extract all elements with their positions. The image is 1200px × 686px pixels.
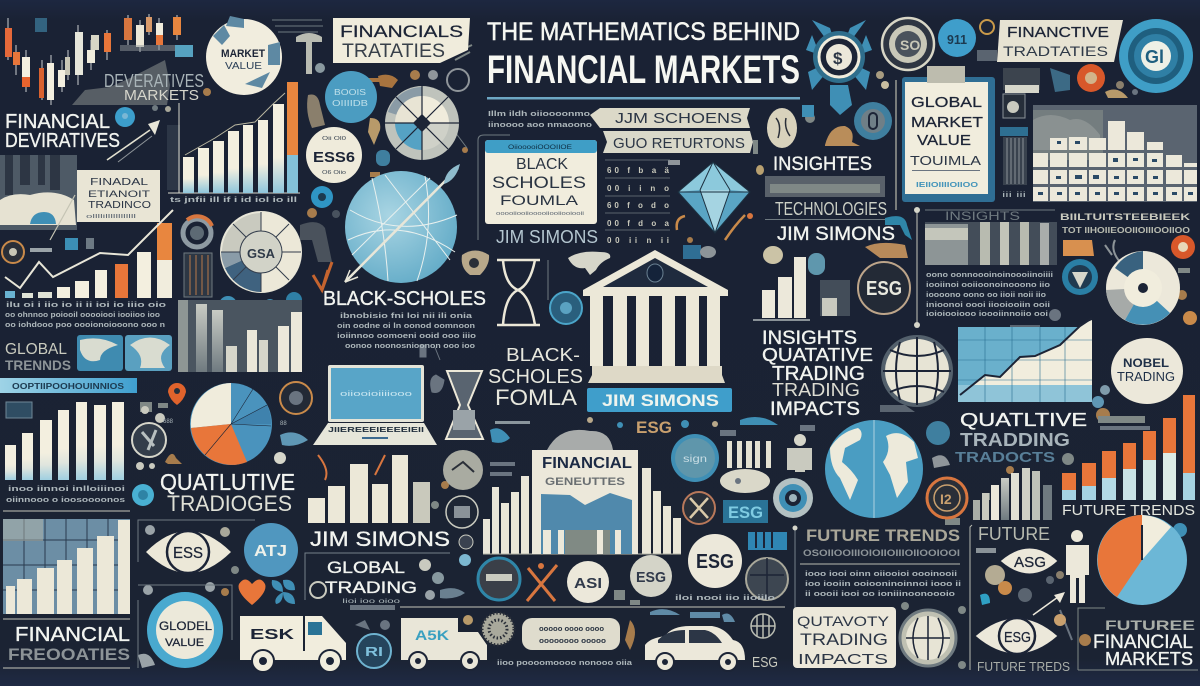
icon: truck ESK: ESK — [250, 626, 294, 643]
icon: small orange ring — [980, 20, 994, 34]
heading: black scholes fomla: FOMLA — [495, 385, 577, 410]
panel: future financial markets: MARKETS — [1105, 649, 1193, 669]
truck: A5K: A5K — [415, 627, 449, 643]
heading: insights quatative impacts: TRADING — [772, 363, 865, 385]
text block: intro: iinoooo aoo nmaoono — [488, 122, 592, 129]
ribbon: jim schoens — [590, 108, 750, 128]
heading: future treds: FUTURE TREDS — [977, 659, 1070, 674]
chart: pie future — [1097, 515, 1187, 605]
blue strip heading: OOPTIIPOOHOUINNIOS — [12, 382, 125, 391]
heading: quatative trading: TRADDING — [960, 430, 1070, 450]
badge: ATJ: ATJ — [254, 543, 287, 560]
clipboard: global market value: GLOBAL — [911, 94, 982, 111]
heading: qualitative tradioges: TRADIOGES — [167, 491, 292, 516]
bar chart: orange future trends — [1062, 395, 1195, 500]
text: esg small: ESG — [752, 654, 778, 671]
text block: insights body — [926, 272, 1053, 318]
laptop: oiiooioiiiiooo — [340, 391, 412, 398]
chart: pie dial GSA: GSA — [247, 246, 276, 261]
badge: blue sign: sign — [683, 454, 707, 465]
table of symbols: 00 ii n ii — [607, 236, 669, 245]
icon: donut — [183, 216, 212, 247]
heading: global trends: GLOBAL — [5, 341, 67, 358]
badge: gray moon — [443, 450, 483, 490]
gear icon: $ — [833, 49, 843, 68]
heading: financial deveratives — [5, 111, 120, 152]
panel: future financial markets: FINANCIAL — [1093, 632, 1193, 653]
badge: blue circle: BOOIS — [334, 88, 366, 97]
candlestick chart — [5, 14, 193, 105]
panel: quantity trading impacts: TRADING — [800, 630, 888, 649]
badge: nobel trading: NOBEL — [1123, 356, 1169, 370]
panel: global trading: TRADING — [325, 578, 417, 597]
heading: future trends left: OSOIIOOIIIOIOIIOIIIOIIOOIOOI — [803, 548, 960, 558]
text block: insights body: ioooono oono oo iioii noii iio — [926, 292, 1046, 299]
icon: eye ESS — [146, 531, 231, 573]
cluster: misc blobs near global — [419, 554, 471, 600]
bars: center right — [753, 253, 850, 320]
icon: blue badge: RI — [365, 644, 383, 659]
icon: globe bottom — [900, 610, 956, 666]
icon: heart — [239, 580, 265, 605]
heading: qualitative tradioges: QUATLUTIVE — [160, 469, 295, 495]
icon: dotted ball — [482, 613, 514, 645]
text block: scholes body — [337, 313, 476, 350]
icon: blue coin right — [854, 102, 892, 140]
ribbon: financtive — [977, 20, 1123, 62]
badge: market value: VALUE — [225, 61, 262, 72]
icon: blue dark circle — [478, 558, 520, 600]
heading: black-scholes: BLACK-SCHOLES — [323, 288, 486, 310]
badge: ESS6: Oii Ol0 — [322, 136, 346, 142]
badge: glodel value — [147, 592, 223, 668]
badge: blue circle: OIIIIDB — [332, 99, 368, 108]
panel: black scholes formula: FOUMLA — [500, 192, 579, 208]
heading: financial bottom left — [8, 624, 130, 664]
heading: insights quatative impacts: QUATATIVE — [762, 345, 873, 365]
text block: future trends body: ioo iooiin ooiooninoinnoi iooo ii — [805, 581, 961, 588]
ribbon: returtons — [603, 131, 753, 153]
chart: pie — [190, 383, 272, 465]
clipboard: global market value — [896, 66, 995, 210]
badge: ESG gray — [630, 555, 672, 597]
banner: jim simons: JIM SIMONS — [602, 391, 719, 410]
icons: orange tag and badge — [1063, 235, 1195, 259]
heading: quatative trading: QUATLTIVE — [960, 410, 1087, 430]
panel: black scholes formula — [478, 135, 597, 240]
icon: animal — [568, 252, 610, 275]
text block: insights body: oono oonnoooinoinoooiinoiiii — [926, 272, 1053, 279]
panel: black scholes formula: OiiooooiOOOIIOE — [508, 145, 572, 151]
badge: market value: MARKET — [221, 48, 265, 60]
icon: ring badge — [132, 423, 166, 457]
panel: black scholes formula: BLACK — [516, 156, 568, 173]
heading: jim simons center: JIM SIMONS — [496, 227, 598, 247]
banner: jim simons — [587, 388, 732, 412]
text block: chart caption: inoo iinnoi inlloiiinoi — [8, 486, 125, 493]
icon: blue shield — [1062, 259, 1098, 295]
panel: financials tratatties: TRATATIES — [342, 41, 445, 62]
panel: financial trading note: ollllillllllllllll — [86, 214, 136, 220]
laptop: JIIEREEEIEEEEIEII — [328, 427, 424, 434]
heading: insights quatative impacts: INSIGHTS — [762, 328, 857, 349]
heading: black scholes fomla: SCHOLES — [488, 366, 583, 388]
heading: global trends: TRENNDS — [5, 357, 71, 373]
heading: insightes and technologies: TECHNOLOGIES — [775, 199, 887, 219]
text block: under chart: oo iohdooo poo oooionoiooono ooo n — [5, 322, 165, 329]
text block: scholes body: oin oodne oi ln oonod oomnoon — [337, 323, 475, 330]
decor: orange figures — [677, 213, 753, 240]
heading: quatative trading: TRADOCTS — [955, 449, 1055, 466]
ribbon: returtons: GUO RETURTONS — [613, 135, 745, 152]
icon: ring — [446, 496, 478, 528]
badge: ESS6: ESS6 — [313, 149, 355, 166]
pointer line — [50, 195, 75, 240]
badge: blue circle small — [938, 19, 976, 57]
small panels: right top: iii iii — [1002, 192, 1027, 199]
heading: insights quatative impacts: TRADING — [772, 380, 860, 400]
icon: column building — [184, 253, 212, 297]
icon: orange ring badge — [280, 382, 312, 414]
icon: blue sweep — [865, 216, 912, 258]
panel: quantity trading impacts: QUTAVOTY — [797, 613, 890, 629]
table of symbols — [605, 160, 670, 245]
text strip: small labels: iloi nooi iio iioiilo — [675, 595, 775, 602]
heading: black scholes fomla — [488, 345, 583, 410]
arrow: up right — [107, 120, 160, 162]
cream blob — [720, 469, 770, 493]
chart: line over bars — [5, 210, 173, 298]
heading: insights quatative impacts — [762, 328, 873, 420]
text block: intro — [488, 111, 592, 129]
icon: blue dial — [550, 292, 582, 324]
text strip: small labels: iioo poooomoooo nonooo oiia — [497, 660, 632, 667]
icon: hourglass lower — [446, 371, 483, 439]
badge: ESG — [858, 262, 910, 314]
icon cluster: small screens — [30, 238, 94, 252]
badge: market value — [206, 16, 282, 95]
panel: quantity trading impacts: IMPACTS — [798, 651, 888, 668]
badge: esg blue — [723, 500, 768, 523]
icon: eye ESS: ESS — [173, 545, 203, 562]
text block: future trends body — [805, 571, 961, 598]
badge: blue circle small: 911 — [947, 32, 967, 47]
earth globe — [825, 420, 923, 518]
badge: glodel value: GLODEL — [159, 619, 212, 633]
icon: gray ring — [746, 558, 788, 600]
text block: scholes body: oonoo noonosnioonon ooo ioo — [345, 343, 475, 350]
badge: ESG: ESG — [866, 278, 902, 300]
clipboard: global market value: TOUIMLA — [910, 153, 981, 168]
panel: financial trading note: FINADAL — [90, 177, 149, 188]
badge: ASI: ASI — [574, 575, 602, 592]
panel: global trading: Iioi ioo oioo — [342, 599, 401, 605]
coin icon: SO — [900, 37, 920, 53]
panel: financial trading note: ETIANOIT — [88, 189, 151, 199]
panel: global trading — [305, 553, 450, 605]
text block: insights body: inioonoi oooi iiooiooiin ooii — [926, 302, 1050, 309]
truck: A5K — [401, 618, 487, 670]
ribbon: financtive: FINANCTIVE — [1007, 24, 1109, 41]
text block: intro: Illm ildh oiioooonmo — [488, 111, 590, 118]
icon: person — [1066, 530, 1089, 603]
icon: globe small — [751, 614, 775, 638]
panel: global trading: GLOBAL — [327, 558, 405, 577]
bar chart: grid panel — [3, 519, 130, 668]
stripes — [727, 441, 771, 468]
ribbon: jim schoens: JJM SCHOENS — [615, 110, 742, 127]
panel: financials tratatties: FINANCIALS — [340, 22, 463, 41]
decor strip above financial panel — [490, 417, 778, 443]
icon: snail blob — [802, 71, 889, 146]
panel: black scholes formula: SCHOLES — [492, 173, 586, 192]
icon: blue book — [748, 532, 787, 550]
clipboard: global market value: IEIIOIIIIOIIOO — [916, 182, 979, 189]
icon: blue coin — [132, 484, 154, 506]
radial chart — [385, 86, 459, 160]
clipboard: global market value: MARKET — [911, 114, 983, 131]
heading: onds tail — [459, 535, 473, 549]
icon: truck ESK — [240, 616, 346, 672]
icon: ring orange: I2 — [940, 491, 952, 507]
chart: donut — [1106, 251, 1180, 325]
text block: under chart: oo ohnnoo poiooil ooooiooi iooiioo ioo — [5, 312, 160, 319]
panel: future eye chart: ASG — [1014, 554, 1046, 571]
text block: insights body: ioioiooiooo ioooiinnoiio ooi — [926, 311, 1048, 318]
label: pill — [522, 618, 620, 650]
icon: gavel — [272, 20, 325, 74]
text block: under chart: ilu oi i iio io ii ii ioi io iiio oio — [6, 302, 166, 309]
coin icon — [882, 18, 934, 70]
title: THE MATHEMATICS BEHIND — [487, 18, 800, 46]
label: pill: ooooo oooo oooo — [539, 626, 604, 633]
heading: insightes and technologies: INSIGHTES — [773, 154, 872, 175]
bar chart: under laptop — [308, 455, 430, 523]
table of symbols: 00 i i n o — [607, 184, 669, 193]
panel: financial trading note — [77, 170, 160, 222]
icon: blue badge — [357, 634, 391, 668]
heading: black scholes fomla: BLACK- — [506, 345, 580, 365]
badge: ESS6: O6 Oiio — [322, 170, 346, 176]
icon: orange drop — [168, 383, 186, 405]
chart: gray bars — [178, 300, 302, 372]
badge: glodel value: VALUE — [165, 637, 204, 649]
panel: quantity trading impacts — [793, 607, 896, 668]
icon: orange x tools — [527, 563, 557, 601]
globe with needle — [345, 164, 460, 283]
title: FINANCIAL MARKETS — [487, 48, 800, 92]
panel: future financial markets — [1078, 608, 1198, 670]
text block: under chart — [5, 302, 166, 329]
panel: financials tratatties — [333, 18, 470, 63]
badge: ASI — [567, 561, 609, 603]
text block: scholes body: ibnobisio fni loi nii ili onia — [340, 313, 472, 320]
ribbon: financtive: TRADTATIES — [1003, 43, 1108, 59]
heading: future trends right: FUTURE TRENDS — [1062, 502, 1195, 519]
icon: blue flower — [272, 580, 295, 604]
text block: future trends body: iooo iooi oinn oiiooioi oooinooii — [805, 571, 957, 578]
chart: pie dial GSA — [221, 212, 301, 292]
badge: esg blue: ESG — [728, 503, 763, 522]
line chart panel — [958, 318, 1092, 402]
pointer dot line — [792, 526, 798, 610]
text block: right header: BIILTUITSTEEBIEEK — [1060, 212, 1191, 222]
image tiles — [77, 335, 172, 371]
heading: insights quatative impacts: IMPACTS — [770, 399, 860, 420]
panel: insights with gray bars — [914, 207, 1057, 328]
badge: esg large: ESG — [696, 551, 734, 573]
badge: nobel trading — [1111, 338, 1183, 404]
heading: financial deveratives: FINANCIAL — [5, 111, 110, 133]
heading: ESG orange: ESG — [636, 418, 672, 437]
badge: nobel trading: TRADING — [1117, 369, 1175, 384]
image: city cloud — [0, 155, 77, 230]
financial chart with panel: GENEUTTES — [545, 476, 625, 488]
icon: person faint — [787, 434, 812, 472]
label: pill: oooooooo ooooo — [539, 638, 606, 645]
badge: ATJ — [244, 523, 298, 577]
heading: deverative markets — [104, 71, 204, 104]
bar chart: left middle — [5, 402, 124, 480]
panel: insights with gray bars: INSIGHTS — [945, 209, 1020, 223]
text block: chart caption: oiinnooo o ioosoooonos — [6, 497, 125, 504]
table of symbols: 00 f d o a — [607, 219, 670, 228]
panel: black scholes formula: ooooiiooiiooooiiooiiooiooii — [496, 211, 584, 217]
bar chart: rising bars with trend — [167, 82, 300, 204]
heading: future trends left: FUTURE TRENDS — [806, 526, 960, 545]
text strip: small labels — [400, 595, 785, 667]
chart: grid bars — [1033, 105, 1197, 202]
heading: insightes and technologies — [765, 154, 895, 245]
clipboard: global market value: VALUE — [917, 132, 971, 149]
heading: future trends left — [800, 526, 960, 564]
badge: blue circle — [325, 71, 377, 123]
icon: car — [645, 626, 745, 671]
table of symbols: 60 f o d o — [607, 201, 669, 210]
title — [487, 18, 800, 100]
heading: deverative markets: MARKETS — [124, 87, 199, 104]
eye with arrow: ESG — [975, 592, 1066, 654]
decor: scattered small icons: 688 — [163, 419, 174, 425]
text block: right header: TOT IIHOIIEOOIIOIIIOOIIOO — [1062, 226, 1190, 235]
icon: blue dot — [115, 107, 135, 127]
big blue ring — [1119, 19, 1193, 93]
blue strip heading — [0, 378, 137, 393]
icon: ring orange — [927, 478, 967, 518]
badge: ESG gray: ESG — [636, 569, 666, 586]
badge: blue sign — [671, 434, 719, 482]
table of symbols: 60 f b a ä — [607, 166, 670, 175]
text block: insights body: iooiinoi ooiioonoinooono iio — [926, 282, 1050, 289]
icon: ring x — [683, 492, 715, 524]
bar chart: rising bars with trend: ts jnfii ill if i id iol io ill — [170, 197, 297, 204]
icon: hourglass upper — [497, 260, 548, 325]
heading: qualitative tradioges — [160, 469, 295, 516]
icon: globe grid — [883, 337, 951, 405]
icon: bull head — [462, 250, 489, 275]
laptop — [313, 365, 437, 445]
text block: future trends body: ii oooii iooi oo ioniiinoonoooio — [805, 591, 955, 598]
text block: chart caption — [3, 486, 130, 511]
icon: orange ring — [2, 241, 24, 263]
icon: diamond — [678, 162, 750, 233]
bar chart: gray narrow — [973, 468, 1052, 520]
badge: esg large — [688, 534, 742, 588]
panel: future eye chart: FUTURE — [978, 524, 1050, 544]
text block: right header — [1060, 212, 1191, 235]
heading: global trends — [5, 341, 71, 373]
heading: financial bottom left: FINANCIAL — [15, 624, 130, 646]
icon: blue rings — [773, 478, 813, 518]
heading: financial deveratives: DEVIRATIVES — [5, 130, 120, 152]
panel: future financial markets: FUTUREE — [1105, 617, 1195, 633]
big blue ring: Gl — [1145, 47, 1164, 67]
financial chart with panel: FINANCIAL — [542, 455, 632, 472]
decor: scattered small icons: oo — [193, 419, 200, 425]
small panels: right top — [1000, 68, 1070, 199]
heading: financial bottom left: FREOOATIES — [8, 645, 130, 664]
heading: deverative markets: DEVERATIVES — [104, 71, 204, 91]
heading: quatative trading — [955, 410, 1087, 466]
badge: ESS6 — [306, 127, 362, 183]
text block: scholes body: ioiinnoo oomoeni ooid ooo iiio — [337, 333, 476, 340]
panel: future eye chart — [970, 524, 1058, 670]
gear icon — [806, 20, 872, 115]
temple — [583, 250, 728, 383]
bracket frame — [138, 520, 255, 668]
heading: jim simons left: JIM SIMONS — [310, 528, 450, 551]
financial chart with panel — [483, 430, 681, 554]
heading: insightes and technologies: JIM SIMONS — [777, 224, 895, 245]
icon: orange medallion — [1077, 64, 1105, 92]
decor: scattered small icons: 88 — [280, 421, 287, 427]
panel: financial trading note: TRADINCO — [88, 200, 151, 211]
eye with arrow: ESG: ESG — [1004, 629, 1031, 646]
